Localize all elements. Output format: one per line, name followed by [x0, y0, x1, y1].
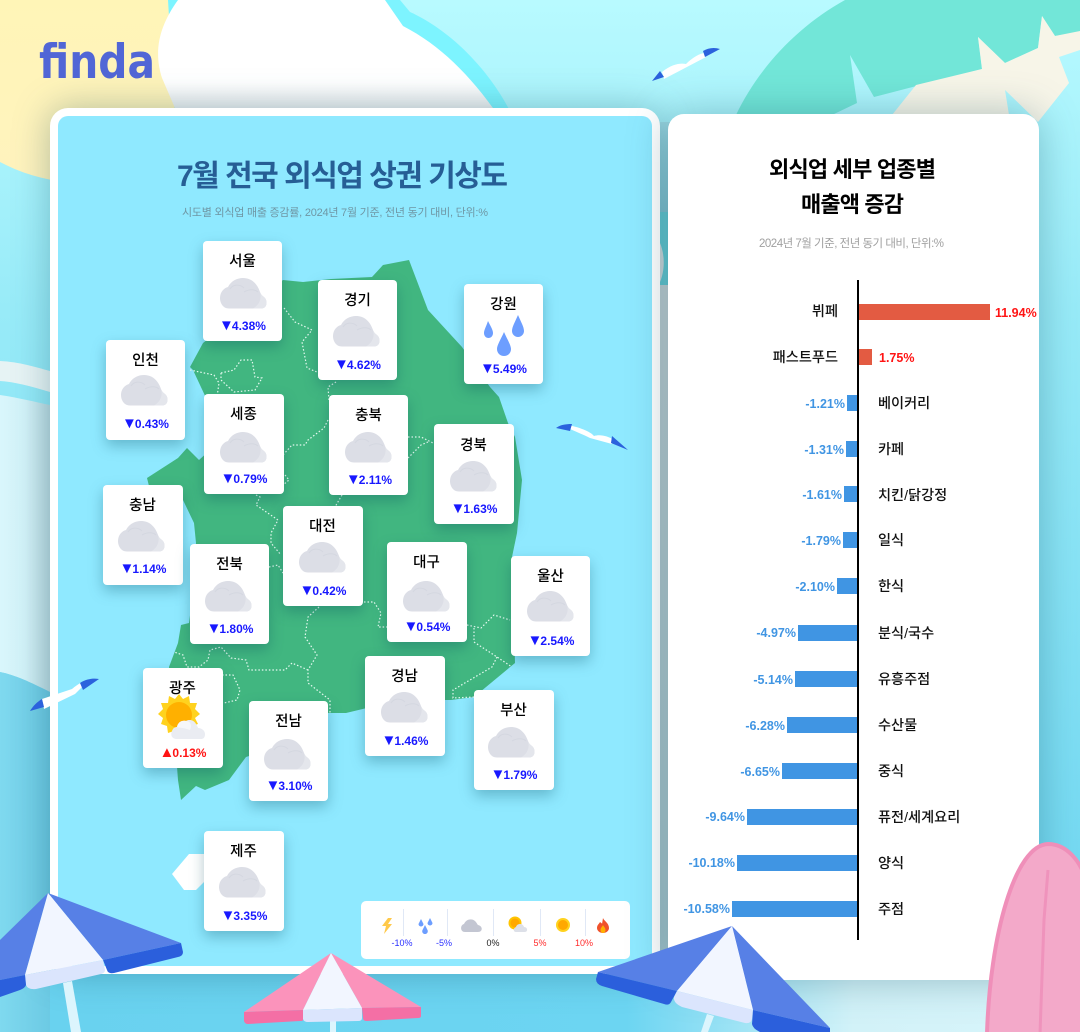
- card: 경북: 경북: [460, 437, 487, 454]
- card: 전남: 전남: [275, 713, 302, 730]
- card: 제주: ▼3.35%: [221, 907, 268, 924]
- value labels: -10.58%: [683, 902, 730, 916]
- card: 경기: [318, 280, 397, 380]
- card: 광주: ▲0.13%: [160, 744, 207, 761]
- icon: lightning: [382, 918, 392, 934]
- card: 강원: ▼5.49%: [480, 360, 527, 377]
- category labels: 양식: [878, 856, 904, 872]
- bars: [859, 304, 990, 365]
- category labels: 주점: [878, 902, 904, 918]
- card: 제주: 제주: [230, 843, 257, 860]
- category labels: 일식: [878, 533, 904, 549]
- value labels: -1.61%: [802, 488, 842, 502]
- category labels: 중식: [878, 764, 904, 780]
- icon: sun: [556, 918, 570, 932]
- background hill and rock: [736, 0, 1080, 122]
- value labels: 1.75%: [879, 351, 914, 365]
- category labels: [773, 304, 960, 918]
- panel: map: [50, 108, 660, 974]
- card: 서울: [203, 241, 282, 341]
- card: 서울: 서울: [229, 253, 256, 270]
- card: 울산: 울산: [537, 568, 564, 585]
- card: 광주: 광주: [169, 680, 196, 697]
- surfboard: [987, 844, 1080, 1032]
- card: 울산: ▼2.54%: [528, 632, 575, 649]
- legend labels: -5%: [436, 938, 452, 948]
- value labels: 11.94%: [995, 306, 1037, 320]
- card: 세종: [204, 394, 284, 494]
- card: 부산: [474, 690, 554, 790]
- card: 경기: ▼4.62%: [334, 356, 381, 373]
- value labels: -1.31%: [804, 443, 844, 457]
- card: 강원: 강원: [490, 296, 517, 313]
- value labels: -9.64%: [705, 810, 745, 824]
- icon: sun with cloud: [508, 916, 527, 932]
- legend labels: -10%: [391, 938, 413, 948]
- category labels: 뷔페: [812, 304, 838, 320]
- card: 부산: ▼1.79%: [491, 766, 538, 783]
- value labels: [683, 306, 1037, 916]
- card: 전남: ▼3.10%: [266, 777, 313, 794]
- card: 세종: 세종: [230, 406, 257, 423]
- value labels: -6.65%: [740, 765, 780, 779]
- card: 대전: 대전: [309, 518, 336, 535]
- card: 인천: 인천: [132, 352, 159, 369]
- logo: finda: [39, 35, 155, 90]
- card: 부산: 부산: [500, 702, 527, 719]
- background cloud: [158, 0, 512, 115]
- category labels: 치킨/닭강정: [878, 488, 947, 504]
- card: 경기: 경기: [344, 292, 371, 309]
- value labels: -1.79%: [801, 534, 841, 548]
- card: 광주: [143, 668, 223, 768]
- card: 충북: [329, 395, 408, 495]
- card: 충북: 충북: [355, 407, 382, 424]
- card: 경남: ▼1.46%: [382, 732, 429, 749]
- category labels: 퓨전/세계요리: [878, 810, 960, 826]
- value labels: -1.21%: [805, 397, 845, 411]
- category labels: 유흥주점: [878, 671, 930, 688]
- legend labels: 0%: [486, 938, 500, 948]
- panel frame: [50, 108, 660, 974]
- icon: cloud: [461, 919, 482, 932]
- sun backdrop: [0, 0, 268, 183]
- card: 제주: [204, 831, 284, 931]
- axis: [857, 280, 859, 940]
- card: 대구: ▼0.54%: [404, 618, 451, 635]
- legend labels: 5%: [533, 938, 547, 948]
- map subtitle: 시도별 외식업 매출 증감률, 2024년 7월 기준, 전년 동기 대비, 단위:%: [182, 206, 488, 219]
- bird right: [556, 424, 628, 450]
- chart title: 매출액 증감: [801, 192, 904, 217]
- blue umbrella right: [596, 926, 830, 1032]
- value labels: -5.14%: [753, 673, 793, 687]
- card: 전남: [249, 701, 328, 801]
- Jeju island: [172, 854, 206, 890]
- blue umbrella left: [0, 893, 183, 1032]
- category labels: 베이커리: [878, 396, 930, 412]
- card: 대전: ▼0.42%: [300, 582, 347, 599]
- map title: 7월 전국 외식업 상권 기상도: [177, 160, 508, 193]
- icon: flame: [597, 918, 609, 933]
- bird left: [30, 679, 99, 711]
- icon: rain: [418, 918, 432, 934]
- value labels: -10.18%: [688, 856, 735, 870]
- card: 전북: 전북: [216, 556, 243, 573]
- card: 경남: 경남: [391, 668, 418, 685]
- card: 인천: ▼0.43%: [122, 415, 169, 432]
- value labels: -2.10%: [795, 580, 835, 594]
- category labels: 한식: [878, 579, 904, 595]
- chart title: 외식업 세부 업종별: [769, 157, 936, 182]
- chart subtitle: 2024년 7월 기준, 전년 동기 대비, 단위:%: [759, 237, 944, 250]
- card: 경북: ▼1.63%: [451, 500, 498, 517]
- card: 충남: [103, 485, 183, 585]
- legend: [361, 901, 630, 959]
- legend labels: [391, 938, 593, 948]
- category labels: 패스트푸드: [773, 350, 838, 366]
- card: 경남: [365, 656, 445, 756]
- card: 세종: ▼0.79%: [221, 470, 268, 487]
- legend labels: 10%: [575, 938, 593, 948]
- value labels: -6.28%: [745, 719, 785, 733]
- category labels: 분식/국수: [878, 626, 934, 642]
- map of South Korea: [147, 260, 522, 800]
- card: 서울: ▼4.38%: [219, 317, 266, 334]
- category labels: 카페: [878, 442, 904, 458]
- panel: bar chart: [668, 114, 1039, 980]
- card: 인천: [106, 340, 185, 440]
- card: 대구: [387, 542, 467, 642]
- card: 전북: ▼1.80%: [207, 620, 254, 637]
- card: 대구: 대구: [413, 554, 440, 571]
- bird top: [652, 48, 720, 81]
- card: 울산: [511, 556, 590, 656]
- chart title: [769, 157, 936, 217]
- card: 충남: ▼1.14%: [120, 560, 167, 577]
- card: 충북: ▼2.11%: [346, 471, 392, 488]
- card: 경북: [434, 424, 514, 524]
- card: 충남: 충남: [129, 497, 156, 514]
- value labels: -4.97%: [756, 626, 796, 640]
- card: 대전: [283, 506, 363, 606]
- pink umbrella: [244, 953, 421, 1032]
- card: 전북: [190, 544, 269, 644]
- card: 강원: [464, 284, 543, 384]
- category labels: 수산물: [878, 718, 917, 734]
